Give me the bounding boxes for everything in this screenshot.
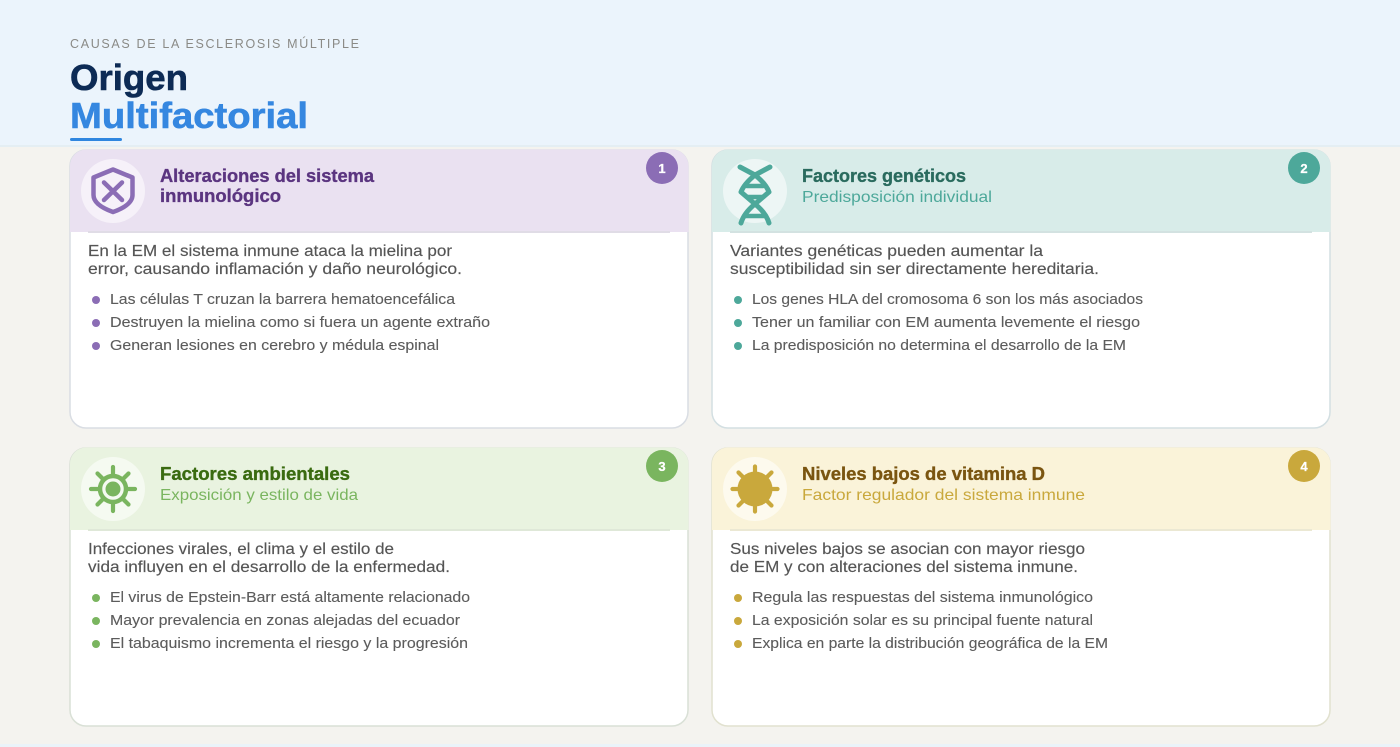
bullet list: genetic factors (734, 292, 1143, 354)
number badge 4: 4 (1300, 459, 1308, 474)
icon: environment gear (81, 457, 145, 521)
description: vitamin D: de EM y con alteraciones del sistema inmune. (730, 559, 1078, 576)
panel header: immune system (70, 150, 688, 232)
icon: sun (723, 457, 787, 521)
number badge 4 (1288, 450, 1320, 482)
icon: shield with cross (81, 159, 145, 223)
description: vitamin D (730, 541, 1085, 576)
bullet list: genetic factors: La predisposición no determina el desarrollo de la EM (752, 338, 1126, 354)
panel header: environmental factors (70, 448, 688, 530)
subheading: vitamin D: Factor regulador del sistema inmune (802, 487, 1085, 504)
description: genetic factors (730, 243, 1099, 278)
heading: immune system: Alteraciones del sistema (160, 165, 375, 186)
subheading: environmental factors: Exposición y estilo de vida (160, 487, 358, 504)
panel header: vitamin D (712, 448, 1330, 530)
icon: DNA helix (723, 159, 787, 223)
bullet list: environmental factors: Mayor prevalencia en zonas alejadas del ecuador (110, 613, 460, 629)
number badge 3: 3 (658, 459, 666, 474)
bullet list: immune system: Destruyen la mielina como si fuera un agente extraño (110, 315, 490, 331)
description: environmental factors (88, 541, 450, 576)
heading: immune system: inmunológico (160, 185, 281, 206)
bullet list: vitamin D: Regula las respuestas del sistema inmunológico (752, 590, 1093, 606)
description: immune system (88, 243, 462, 278)
number badge 3 (646, 450, 678, 482)
description: genetic factors: susceptibilidad sin ser directamente hereditaria. (730, 261, 1099, 278)
title: Origen (70, 57, 188, 98)
description: immune system: error, causando inflamación y daño neurológico. (88, 261, 462, 278)
panel: environmental factors (70, 448, 688, 726)
bullet list: immune system: Las células T cruzan la barrera hematoencefálica (110, 292, 456, 308)
panel: vitamin D (712, 448, 1330, 726)
bullet list: vitamin D: La exposición solar es su principal fuente natural (752, 613, 1093, 629)
header band (0, 0, 1400, 147)
bullet list: immune system (92, 292, 490, 354)
description: environmental factors: Infecciones virales, el clima y el estilo de (88, 541, 394, 558)
heading: environmental factors: Factores ambientales (160, 463, 350, 484)
bullet list: vitamin D: Explica en parte la distribución geográfica de la EM (752, 636, 1108, 652)
description: genetic factors: Variantes genéticas pueden aumentar la (730, 243, 1043, 260)
bullet list: vitamin D (734, 590, 1108, 652)
panel: genetic factors (712, 150, 1330, 428)
number badge 2 (1288, 152, 1320, 184)
number badge 1: 1 (658, 161, 666, 176)
title underline (70, 138, 122, 141)
number badge 2: 2 (1300, 161, 1308, 176)
bullet list: genetic factors: Los genes HLA del cromosoma 6 son los más asociados (752, 292, 1143, 308)
bullet list: environmental factors: El virus de Epstein-Barr está altamente relacionado (110, 590, 470, 606)
panel header: genetic factors (712, 150, 1330, 232)
number badge 1 (646, 152, 678, 184)
description: immune system: En la EM el sistema inmune ataca la mielina por (88, 243, 453, 260)
heading: vitamin D: Niveles bajos de vitamina D (802, 463, 1045, 484)
eyebrow text: CAUSAS DE LA ESCLEROSIS MÚLTIPLE (70, 36, 361, 51)
title (70, 57, 308, 136)
subheading: genetic factors: Predisposición individual (802, 189, 992, 206)
title: Multifactorial (70, 95, 308, 136)
description: vitamin D: Sus niveles bajos se asocian con mayor riesgo (730, 541, 1085, 558)
bullet list: environmental factors: El tabaquismo incrementa el riesgo y la progresión (110, 636, 468, 652)
bullet list: immune system: Generan lesiones en cerebro y médula espinal (110, 338, 439, 354)
panel: immune system (70, 150, 688, 428)
description: environmental factors: vida influyen en el desarrollo de la enfermedad. (88, 559, 450, 576)
heading: immune system (160, 165, 375, 206)
bullet list: genetic factors: Tener un familiar con EM aumenta levemente el riesgo (752, 315, 1140, 331)
bullet list: environmental factors (92, 590, 470, 652)
heading: genetic factors: Factores genéticos (802, 165, 966, 186)
